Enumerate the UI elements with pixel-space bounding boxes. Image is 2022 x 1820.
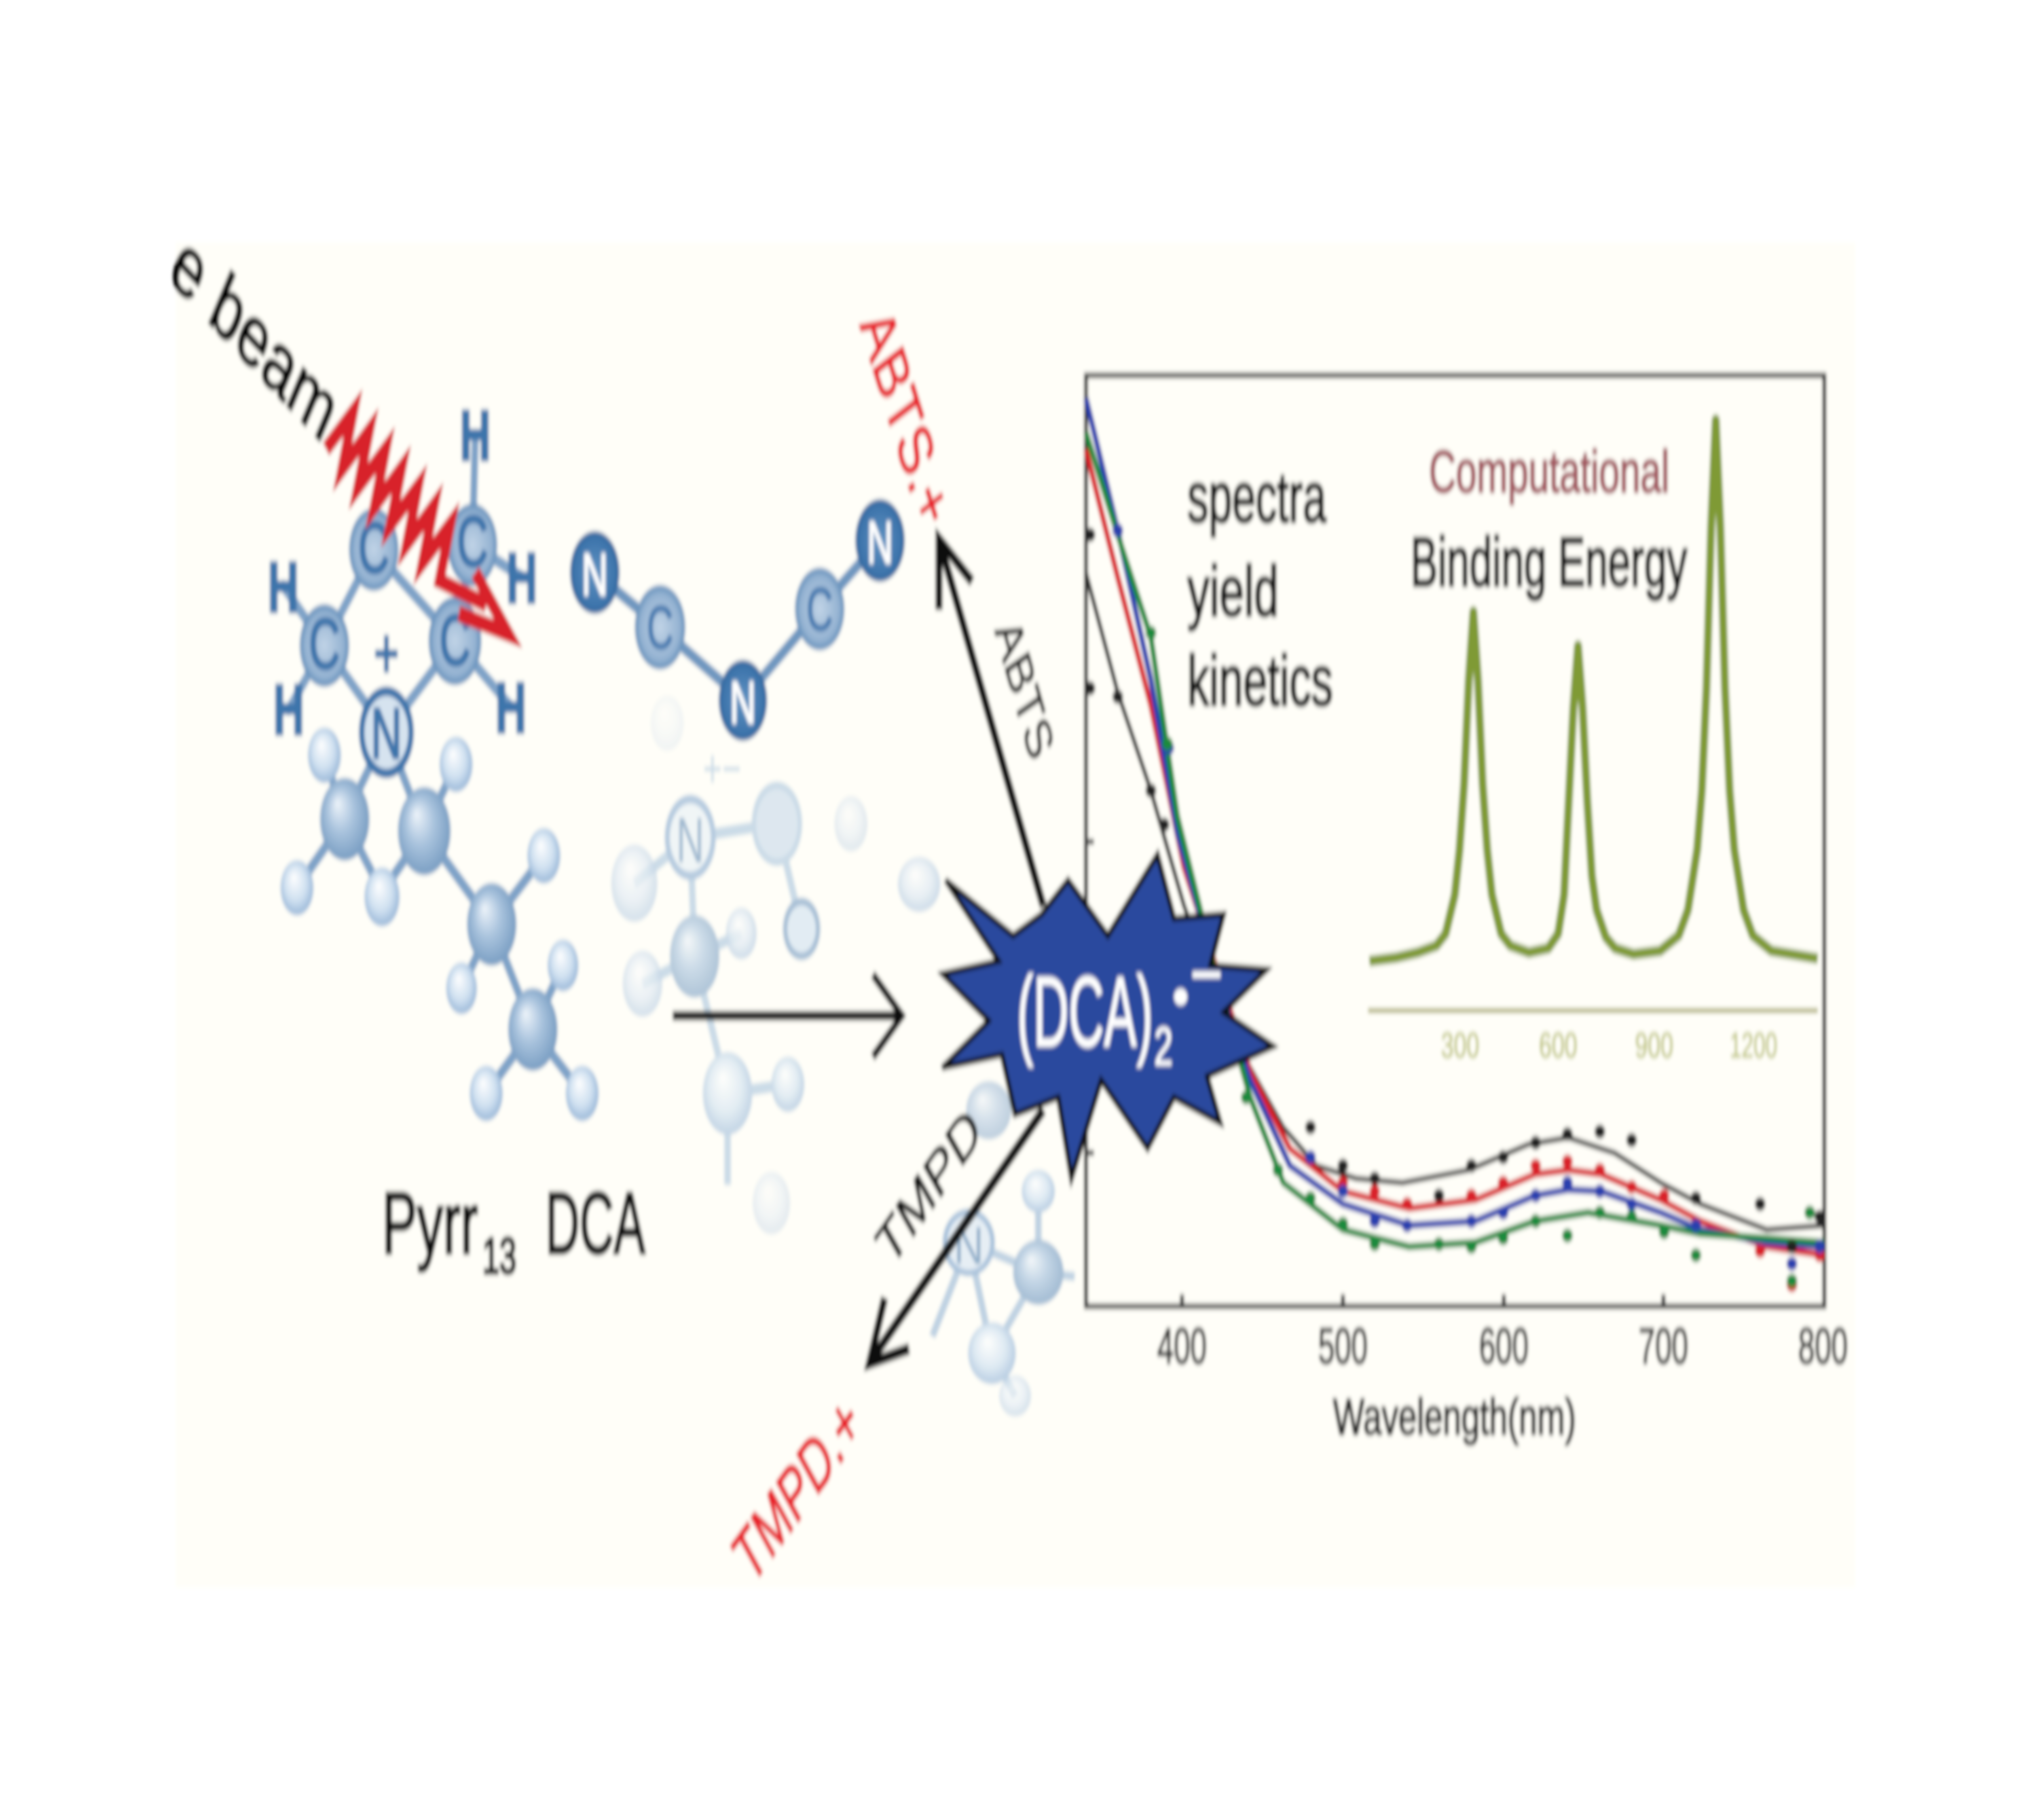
arrow: to TMPD radical: [869, 1110, 1043, 1363]
curve: red: [1086, 450, 1824, 1255]
starburst: (DCA)2 radical anion: (DCA): [1017, 956, 1153, 1068]
icon: red zigzag beam arrow: [326, 413, 508, 634]
chart frame: [1086, 375, 1824, 1306]
arrow: reaction: [673, 975, 902, 1057]
label: TMPD: TMPD: [867, 1094, 989, 1279]
molecule: faded ghost: +−: [703, 738, 741, 799]
molecule: dicyanamide anion: C: [807, 576, 833, 643]
x axis tick labels: 800: [1798, 1317, 1848, 1374]
molecule: dicyanamide anion: C: [647, 594, 673, 662]
x axis tick labels: 400: [1157, 1317, 1207, 1374]
molecule: dicyanamide anion: N: [730, 669, 756, 736]
molecule: Pyrr13 cation: C: [440, 600, 470, 680]
inset tick labels: [1441, 1025, 1777, 1065]
molecule: Pyrr13 cation: H: [506, 538, 537, 618]
molecule: Pyrr13 cation: N: [371, 693, 402, 773]
x axis tick labels: [1157, 1317, 1848, 1374]
text: e beam: e beam: [161, 213, 350, 459]
molecule: Pyrr13 cation: H: [268, 547, 299, 627]
molecule: Pyrr13 cation: +: [374, 613, 399, 693]
molecule: dicyanamide anion: N: [582, 541, 608, 609]
molecule: Pyrr13 cation: H: [495, 668, 527, 747]
molecule: Pyrr13 cation: [268, 395, 599, 1121]
label: ABTS radical cation: ABTS.+: [850, 295, 962, 540]
label: Pyrr13 DCA: DCA: [546, 1174, 645, 1272]
inset curve: [1369, 420, 1818, 961]
label: Pyrr13 DCA: Pyrr: [382, 1174, 478, 1272]
molecule: lower faded ghost: [898, 857, 1075, 1416]
molecule: dicyanamide anion: [570, 499, 905, 741]
curve: black: [1086, 573, 1824, 1230]
inset tick labels: 1200: [1730, 1025, 1777, 1065]
inset axis: [1368, 1009, 1818, 1012]
background panel: [176, 243, 1855, 1587]
arrow: to ABTS radical: [939, 539, 1043, 906]
molecule: faded ghost: N: [677, 804, 704, 876]
x axis tick labels: 500: [1318, 1317, 1368, 1374]
inset tick labels: 600: [1539, 1025, 1577, 1065]
molecule: Pyrr13 cation: C: [457, 501, 488, 581]
text: spectra yield kinetics: yield: [1187, 551, 1279, 631]
molecule: Pyrr13 cation: H: [273, 669, 304, 749]
x axis tick labels: 700: [1639, 1317, 1688, 1374]
inset chart: computational binding energy: [1368, 420, 1818, 1065]
text: spectra yield kinetics: kinetics: [1187, 640, 1333, 721]
molecule: Pyrr13 cation: H: [460, 395, 491, 475]
inset tick labels: 300: [1441, 1025, 1479, 1065]
data points: [1090, 535, 1820, 1246]
molecule: lower faded ghost: N: [954, 1216, 984, 1275]
curve: green: [1086, 432, 1824, 1246]
right illustration group: [898, 375, 1848, 1445]
molecule: Pyrr13 cation: C: [309, 604, 340, 684]
label: ABTS: ABTS: [987, 608, 1063, 769]
curve: blue: [1086, 398, 1824, 1246]
molecule: faded ghost: [611, 696, 867, 1234]
left illustration group: [268, 395, 905, 1285]
x axis tick labels: 600: [1479, 1317, 1529, 1374]
molecule: Pyrr13 cation: C: [358, 508, 389, 588]
molecule: dicyanamide anion: N: [867, 509, 893, 576]
starburst: (DCA)2 radical anion: [942, 855, 1273, 1179]
inset chart: computational binding energy: Binding Energy: [1411, 523, 1688, 601]
x axis title: Wavelength(nm): [1333, 1388, 1576, 1445]
line chart: absorption spectra: [1086, 375, 1848, 1445]
label: Pyrr13 DCA: 13: [482, 1228, 516, 1285]
inset tick labels: 900: [1635, 1025, 1673, 1065]
label: TMPD radical cation: TMPD.+: [723, 1378, 871, 1599]
inset title: Computational: [1429, 438, 1669, 505]
text: spectra yield kinetics: [1187, 457, 1333, 721]
starburst: (DCA)2 radical anion: 2: [1154, 1016, 1173, 1077]
text: spectra yield kinetics: spectra: [1187, 457, 1326, 538]
